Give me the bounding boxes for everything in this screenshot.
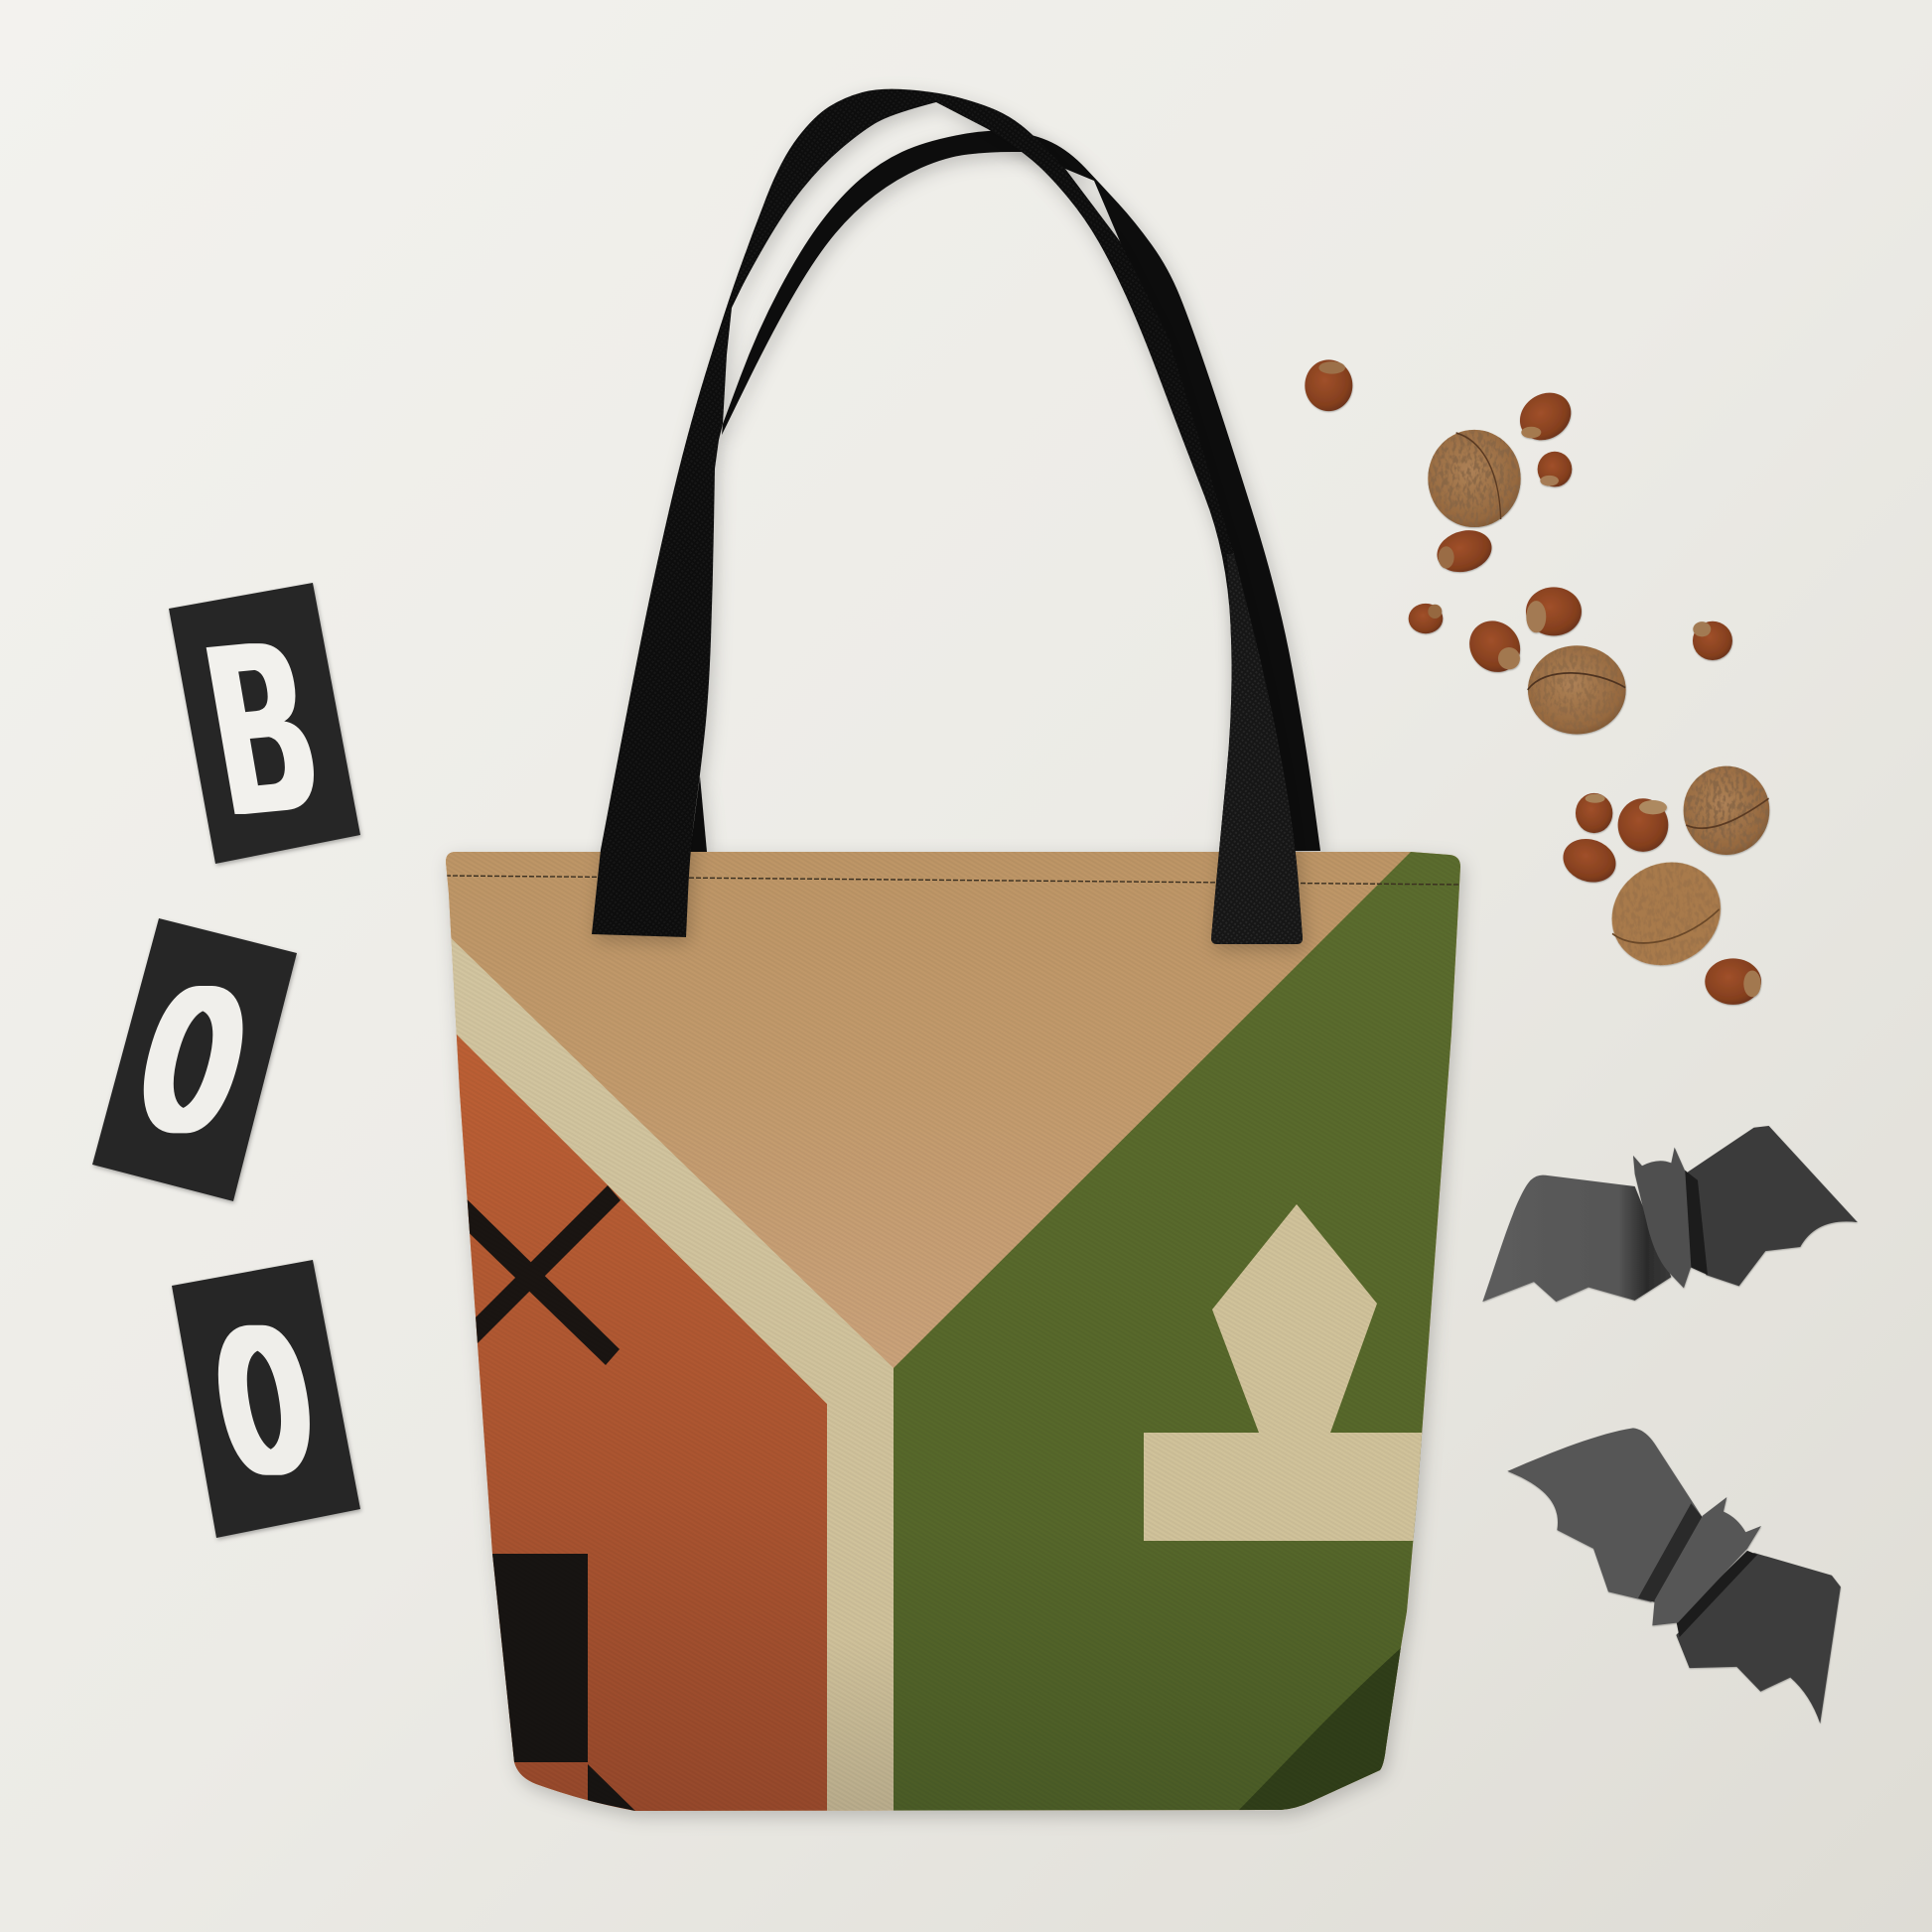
card: letter O xyxy=(92,918,297,1201)
hazelnut 7 xyxy=(1526,587,1582,635)
walnut 2 xyxy=(1528,645,1626,735)
hazelnut 1 xyxy=(1305,359,1352,411)
hazelnut 5 xyxy=(1409,604,1443,633)
paper bat: bottom xyxy=(1507,1428,1841,1724)
bat shadow strip xyxy=(1685,1170,1708,1275)
letter cards: BOO xyxy=(92,583,360,1538)
panel: tan top xyxy=(446,852,1076,1368)
panel: green right xyxy=(894,844,1469,1817)
hazelnut 2 xyxy=(1517,387,1575,446)
card: second letter O: O xyxy=(203,1276,326,1526)
hazelnut 3 xyxy=(1538,452,1572,486)
back handle strap xyxy=(690,131,1320,852)
fabric weave texture xyxy=(437,844,1469,1817)
hazelnut 9 xyxy=(1576,793,1612,833)
walnut 1 xyxy=(1428,430,1521,527)
panel: orange left xyxy=(437,1015,827,1817)
bag body shadow xyxy=(446,852,1460,1811)
bat crease shadow xyxy=(1638,1503,1703,1602)
tote bag printed panels xyxy=(437,844,1469,1817)
shape: cream pawn figure xyxy=(1144,1204,1422,1541)
shape: black cross xyxy=(452,1184,621,1365)
bat shadow strip xyxy=(1676,1551,1757,1637)
hazelnut 4 xyxy=(1435,526,1494,577)
front handle strap xyxy=(592,89,1303,944)
card: second letter O xyxy=(172,1260,360,1538)
bat body xyxy=(1633,1148,1691,1288)
bat lower wing xyxy=(1676,1553,1841,1724)
bat right wing xyxy=(1688,1126,1858,1286)
bat body xyxy=(1652,1497,1761,1625)
bat left wing xyxy=(1482,1175,1671,1302)
card: letter O: O xyxy=(121,935,265,1185)
shape: black block xyxy=(492,1554,588,1762)
nuts cluster xyxy=(1305,359,1769,1005)
hazelnut 6 xyxy=(1466,616,1523,677)
panel: dark green corner xyxy=(1239,1648,1401,1811)
shape: black small triangle xyxy=(588,1764,635,1811)
card: letter B: B xyxy=(194,587,330,867)
hazelnut 8 xyxy=(1693,621,1732,660)
stitching line xyxy=(446,876,1460,885)
bat upper wing xyxy=(1507,1428,1703,1602)
hazelnut 11 xyxy=(1561,835,1618,887)
paper bat: top xyxy=(1482,1126,1858,1302)
panel: cream Y band xyxy=(437,924,894,1817)
walnut 3 xyxy=(1684,766,1769,855)
hazelnut 12 xyxy=(1705,958,1761,1005)
hazelnut 10 xyxy=(1618,798,1668,852)
walnut 4 xyxy=(1607,853,1725,974)
strap lighter right tail xyxy=(1211,554,1303,944)
